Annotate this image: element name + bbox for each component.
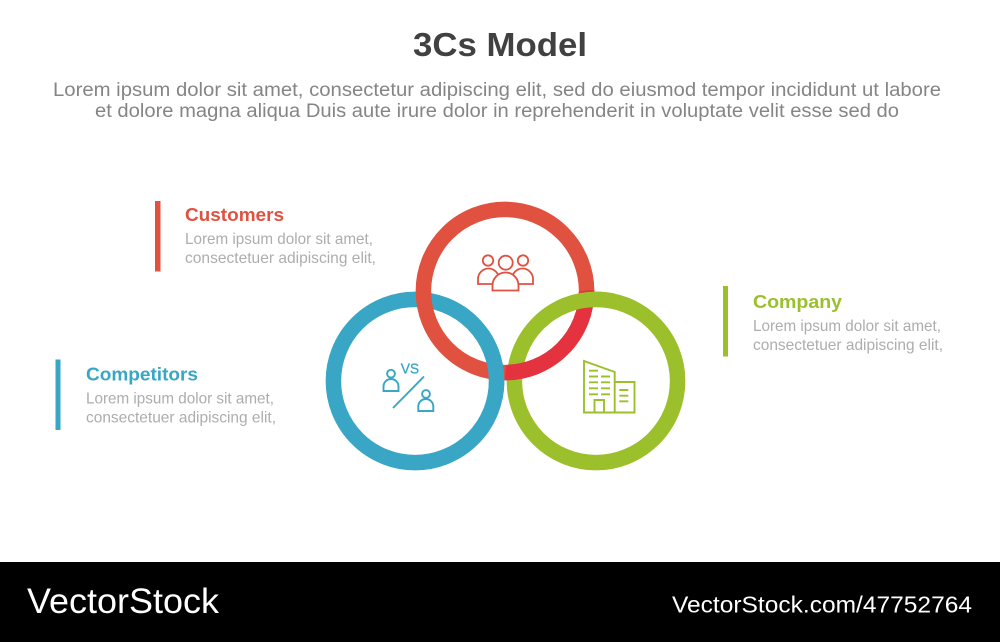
customers heading: Customers: [185, 205, 284, 225]
title: 3Cs Model: [413, 26, 587, 63]
panel: customers: [155, 201, 376, 272]
panel: competitors: [56, 360, 276, 430]
ring crossing: company over customers: [555, 292, 615, 320]
ring: competitors: [333, 299, 497, 463]
company body text: consectetuer adipiscing elit,: [753, 337, 943, 354]
ring overlap: customers inside company: [505, 290, 594, 380]
competitors body text: Lorem ipsum dolor sit amet,: [86, 390, 274, 408]
footer logo: VectorStock: [27, 582, 220, 621]
subtitle text block: Lorem ipsum dolor sit amet, consectetur adipiscing elit, sed do eiusmod tempor incididunt ut labore: [53, 80, 941, 101]
ring: company: [514, 299, 678, 463]
customers accent bar: [155, 201, 160, 272]
competitors heading: Competitors: [86, 364, 198, 384]
footer background: [0, 562, 1000, 642]
customers body text: consectetuer adipiscing elit,: [185, 250, 376, 267]
icon: customers group of people: [478, 255, 533, 290]
competitors accent bar: [56, 360, 60, 430]
customers body text: [185, 231, 376, 267]
competitors body text: consectetuer adipiscing elit,: [86, 410, 276, 426]
icon: company building: [584, 361, 634, 412]
ring: customers: [423, 209, 587, 373]
customers body text: Lorem ipsum dolor sit amet,: [185, 231, 373, 248]
company body text: [753, 318, 943, 354]
company heading: Company: [753, 292, 842, 312]
subtitle text block: et dolore magna aliqua Duis aute irure dolor in reprehenderit in voluptate velit esse sed do: [95, 101, 899, 122]
company body text: Lorem ipsum dolor sit amet,: [753, 318, 941, 335]
competitors body text: [86, 390, 276, 426]
company accent bar: [723, 286, 728, 356]
footer bar: [0, 562, 1000, 642]
icon: competitors versus: VS: [401, 360, 419, 378]
footer url: VectorStock.com/47752764: [672, 592, 972, 618]
interlocking venn rings: [333, 209, 678, 463]
panel: company: [723, 286, 943, 356]
icon: competitors versus: [384, 360, 433, 411]
subtitle text block: [53, 80, 941, 122]
ring crossing: competitors over customers: [468, 330, 504, 400]
